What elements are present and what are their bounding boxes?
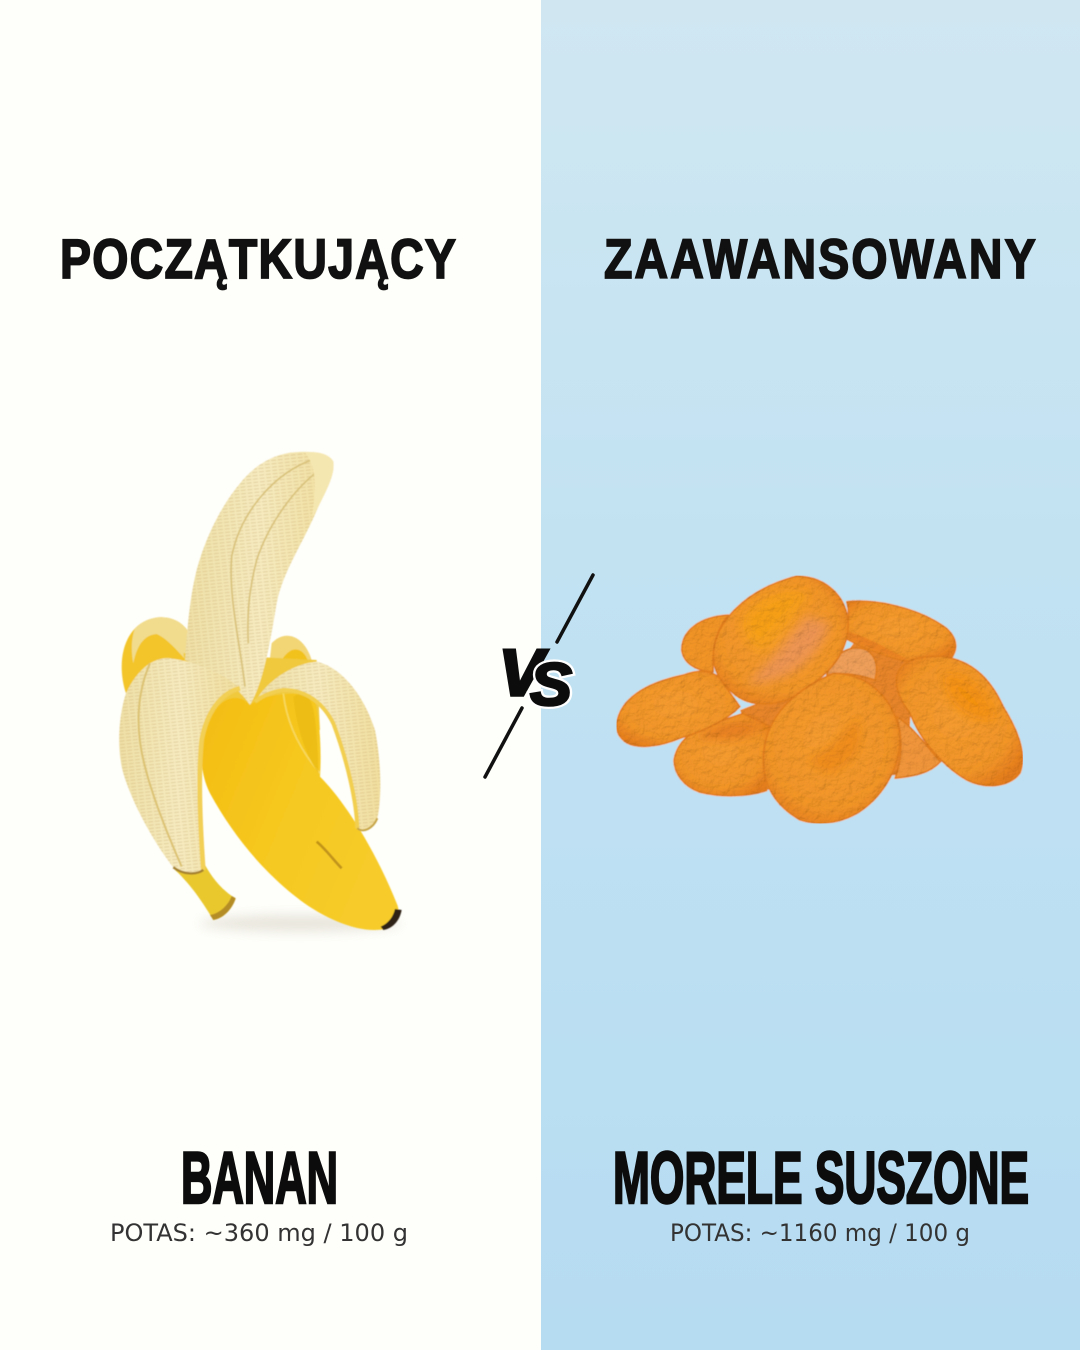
heading: advanced: ZAAWANSOWANY (604, 227, 1036, 290)
illustration: peeled banana (119, 452, 402, 932)
back under-right apricot (895, 717, 941, 778)
vs badge: S (530, 651, 572, 718)
food name: banana: BANAN (181, 1138, 338, 1219)
front apricot (763, 673, 900, 823)
panel: right background (541, 0, 1080, 1350)
top large apricot (713, 576, 848, 704)
back filler (740, 643, 913, 790)
stem (175, 858, 236, 920)
junction underlay (183, 653, 320, 730)
banana tip (305, 452, 334, 518)
slash top (557, 575, 593, 642)
panel: left background (0, 0, 541, 1350)
back left peel (122, 617, 187, 693)
heading: beginner: POCZĄTKUJĄCY (60, 227, 456, 290)
banana flesh (185, 452, 334, 705)
banana shadow (200, 915, 400, 932)
vs text: V (499, 636, 548, 709)
illustration: dried apricots (617, 576, 1023, 823)
vs badge (485, 575, 593, 777)
lower left apricot (674, 713, 770, 796)
slash bottom (485, 708, 522, 777)
left apricot (617, 671, 740, 746)
front right peel (255, 662, 380, 830)
vs badge: S (530, 651, 572, 718)
right apricot (896, 656, 1023, 786)
potassium: dried apricots: POTAS: ~1160 mg / 100 g (670, 1219, 970, 1247)
main yellow body (201, 694, 399, 930)
front left peel (119, 658, 240, 874)
back left apricot (682, 615, 728, 672)
potassium: banana: POTAS: ~360 mg / 100 g (110, 1219, 408, 1247)
top right apricot (845, 601, 956, 662)
back right peel (268, 636, 312, 673)
banana end (381, 909, 402, 930)
back middle apricot (827, 648, 877, 680)
